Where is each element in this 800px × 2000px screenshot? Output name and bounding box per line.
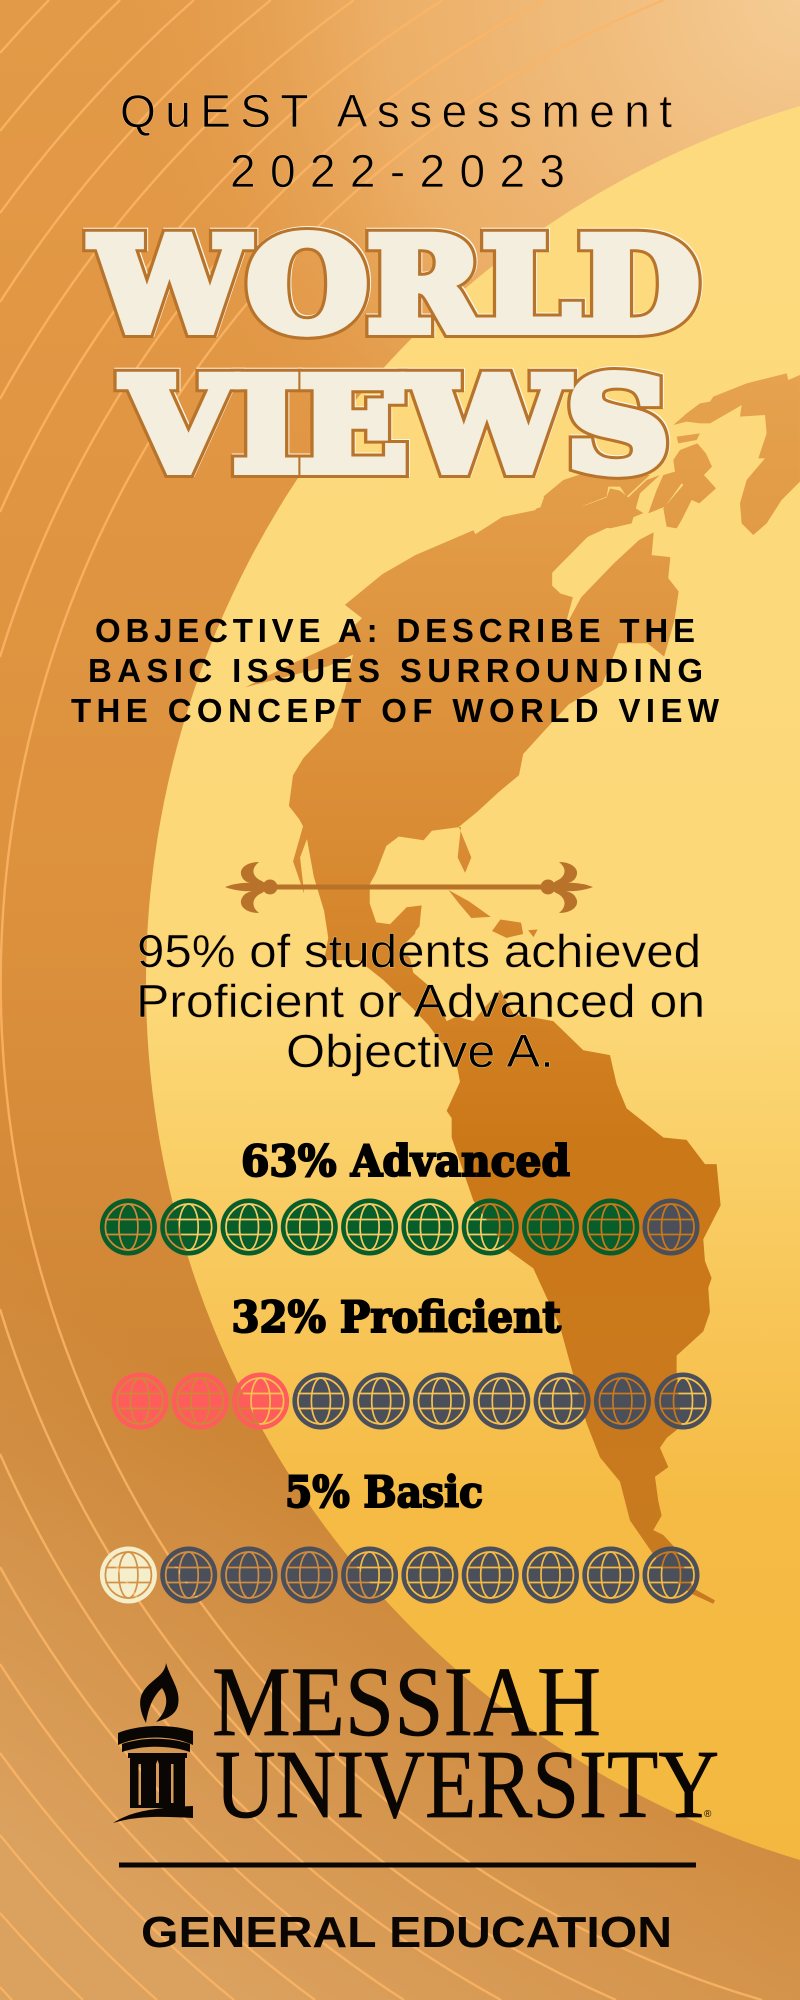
objective heading: OBJECTIVE A: DESCRIBE THE [95,612,695,649]
cream letter fill [90,211,699,501]
outline layer [90,211,699,501]
objective heading: THE CONCEPT OF WORLD VIEW [71,692,720,729]
summary text: 95% of students achieved [137,925,701,977]
summary text: Objective A. [286,1025,554,1077]
logo: Messiah University [113,1646,719,1839]
northern Canada mainland [520,475,660,573]
label: 63% Advanced: 63% Advanced [241,1137,570,1187]
label: 5% Basic: 5% Basic [285,1468,483,1518]
wordmark: MESSIAH: MESSIAH [212,1646,601,1757]
world map: the Americas [245,373,800,1604]
Greenland and northern strip [673,373,800,535]
icon: flame and pillar [113,1663,193,1823]
cream letter fill: VIEWS [122,351,669,501]
right fleur [540,862,593,913]
title: QuEST Assessment 2022-2023 [120,85,672,197]
Baja California [293,825,310,894]
ornament divider [225,862,593,913]
wordmark: UNIVERSITY: UNIVERSITY [215,1731,719,1839]
Arctic islands, west [543,473,650,508]
pictogram row: Advanced [100,1198,699,1256]
Arctic sliver island [677,433,700,443]
footer: General Education: GENERAL EDUCATION [141,1908,672,1957]
left fleur [225,862,278,913]
label: 32% Proficient: 32% Proficient [232,1293,561,1343]
Cuba [449,890,491,918]
summary text [136,925,705,1077]
title: QuEST Assessment 2022-2023: 2022-2023 [230,145,565,197]
white highlight layer: VIEWS [123,350,670,500]
objective heading: BASIC ISSUES SURROUNDING [88,652,703,689]
registered mark: ® [704,1809,712,1820]
Baffin island cluster [648,443,716,528]
title: WORLD VIEWS [90,210,700,501]
divider line [119,1862,696,1868]
white highlight layer: WORLD [91,210,700,360]
summary text: Proficient or Advanced on [136,975,705,1027]
outline layer: VIEWS [122,351,669,501]
white highlight layer [91,210,700,500]
Central and South America [323,900,721,1604]
title: QuEST Assessment 2022-2023: QuEST Assessment [120,85,672,137]
cream letter fill: WORLD [90,211,699,361]
pictogram row: Proficient [112,1372,712,1430]
Puerto Rico [528,929,538,937]
objective heading [71,612,720,729]
Hispaniola [492,920,523,938]
globe disc [146,106,800,1860]
North America [245,475,679,960]
pictogram row: Basic [100,1546,699,1604]
outline layer: WORLD [90,211,699,361]
